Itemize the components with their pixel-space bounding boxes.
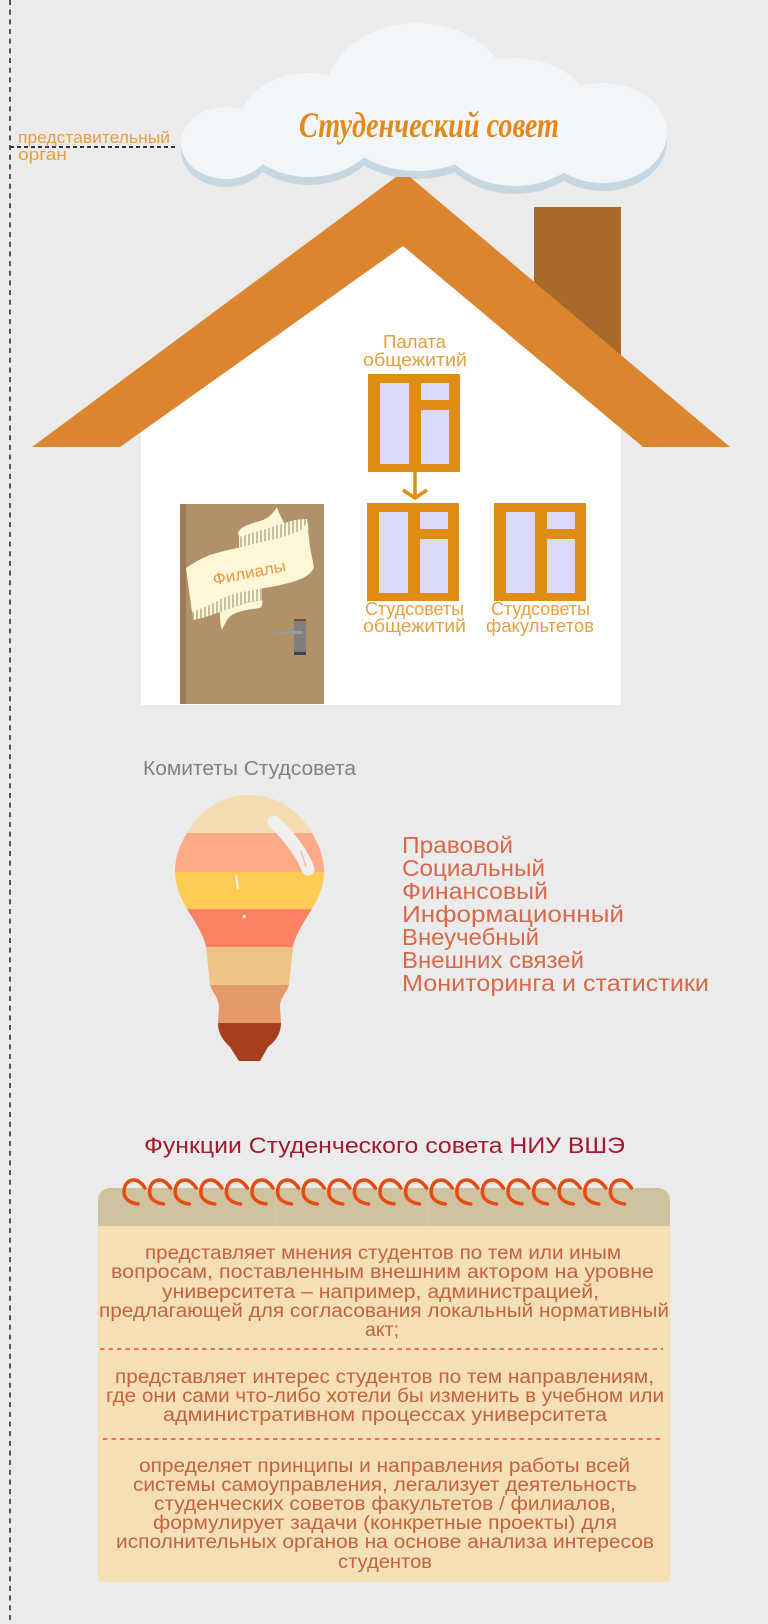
text block: function 1: вопросам, поставленным внешним актором на уровне xyxy=(111,1262,654,1283)
text block: function 1 xyxy=(99,1243,669,1341)
text block: function 2: где они сами что-либо хотели бы изменить в учебном или xyxy=(106,1386,664,1407)
label: faculty councils xyxy=(486,599,594,636)
text block: function 3 xyxy=(116,1456,654,1573)
committees list: Внеучебный xyxy=(402,924,539,950)
text block: function 2 xyxy=(106,1367,664,1426)
text block: function 3: определяет принципы и направления работы всей xyxy=(139,1456,630,1477)
house wall xyxy=(141,230,621,705)
text block: function 3: студенческих советов факультетов / филиалов, xyxy=(154,1494,616,1515)
label: representative body: орган xyxy=(18,145,67,164)
text block: function 1: представляет мнения студентов по тем или иным xyxy=(145,1243,621,1264)
connector: representative body xyxy=(10,146,178,148)
heading: committees: Комитеты Студсовета xyxy=(143,758,357,780)
title: Студенческий совет xyxy=(299,105,559,145)
committees list: Социальный xyxy=(402,855,545,881)
cloud with title xyxy=(181,23,667,194)
label: dormitory chamber: Палата xyxy=(383,332,447,352)
committees list: Мониторинга и статистики xyxy=(402,970,709,996)
roof xyxy=(32,177,730,447)
light bulb xyxy=(170,790,330,1063)
heading: functions: Функции Студенческого совета НИУ ВШЭ xyxy=(144,1133,625,1158)
label: dormitory councils: общежитий xyxy=(363,616,466,636)
window: dormitory councils xyxy=(367,503,459,601)
text block: function 3: формулирует задачи (конкретные проекты) для xyxy=(153,1513,617,1534)
notepad body xyxy=(98,1226,670,1582)
label: faculty councils: факультетов xyxy=(486,616,594,636)
text block: function 3: системы самоуправления, легализует деятельность xyxy=(133,1475,637,1496)
window: faculty councils xyxy=(494,503,586,601)
text block: function 1: предлагающей для согласования локальный нормативный xyxy=(99,1301,669,1322)
bulb highlight xyxy=(274,822,308,869)
label: dormitory councils xyxy=(363,599,466,636)
committees list: Внешних связей xyxy=(402,947,584,973)
arrow xyxy=(403,472,427,498)
text block: function 3: исполнительных органов на основе анализа интересов xyxy=(116,1532,654,1553)
ribbon banner xyxy=(186,507,314,630)
committees list: Информационный xyxy=(402,901,624,927)
committees list xyxy=(402,832,709,996)
label: faculty councils: Студсоветы xyxy=(491,599,590,619)
ribbon label: Филиалы xyxy=(212,558,287,589)
door handle xyxy=(273,619,306,655)
text block: function 2: административном процессах университета xyxy=(163,1405,607,1426)
label: representative body: представительный xyxy=(18,128,170,147)
label: representative body xyxy=(18,128,170,164)
door xyxy=(180,504,324,704)
committees list: Правовой xyxy=(402,832,513,858)
notepad xyxy=(98,1180,670,1582)
left dashed timeline xyxy=(9,0,11,1624)
label: dormitory chamber: общежитий xyxy=(363,350,467,370)
notepad header xyxy=(98,1188,670,1226)
committees list: Финансовый xyxy=(402,878,548,904)
chimney xyxy=(534,207,621,355)
label: dormitory chamber xyxy=(363,332,467,370)
text block: function 1: акт; xyxy=(365,1320,399,1341)
window: dormitory chamber xyxy=(368,374,460,472)
text block: function 3: студентов xyxy=(338,1552,432,1573)
text block: function 1: университета – например, администрацией, xyxy=(162,1282,599,1303)
text block: function 2: представляет интерес студентов по тем направлениям, xyxy=(115,1367,654,1388)
spiral binding xyxy=(124,1180,631,1204)
label: dormitory councils: Студсоветы xyxy=(365,599,464,619)
